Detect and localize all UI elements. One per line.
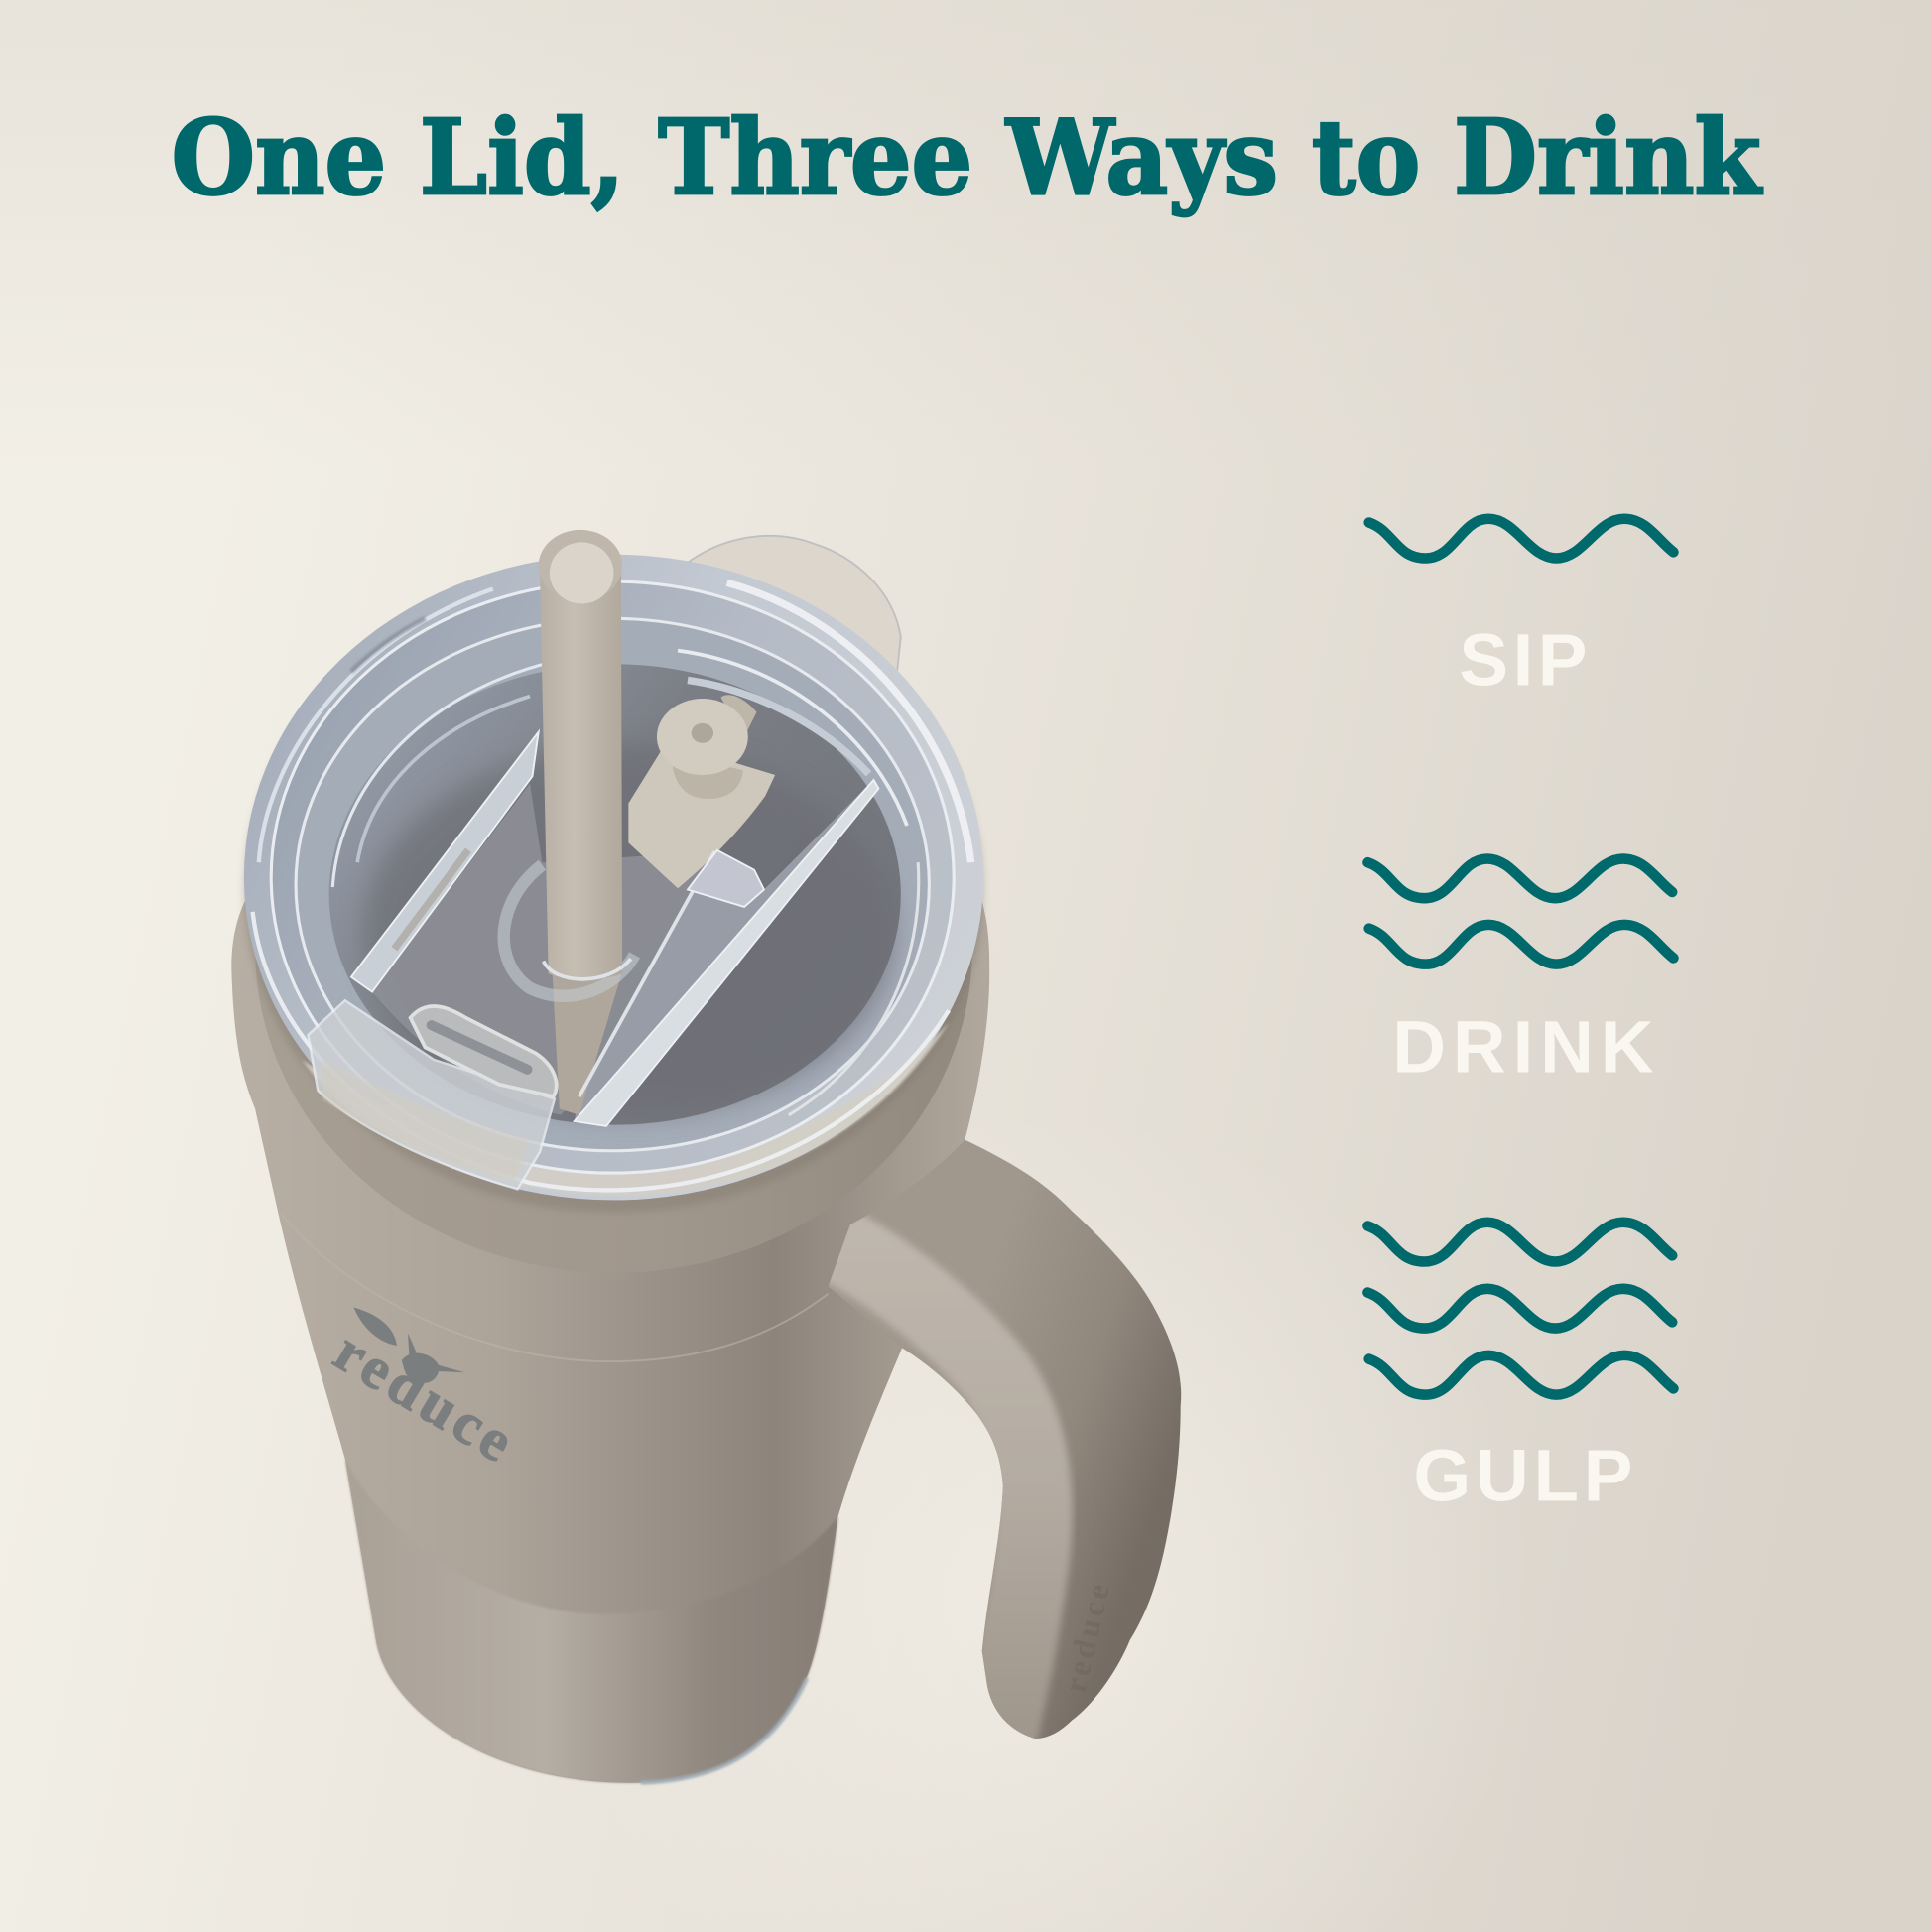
lid outer rim: [244, 555, 983, 1200]
straw opening: [550, 542, 613, 603]
latch grip: [411, 1006, 557, 1096]
lid shadow on neck: [244, 567, 983, 1213]
drink indicator: [1367, 858, 1673, 1088]
stopper base: [628, 742, 775, 888]
hinge clip: [688, 850, 764, 907]
clear strip between rails: [575, 780, 873, 1126]
tumbler handle: [828, 1139, 1181, 1739]
drink wave 1: [1367, 858, 1672, 898]
central slider plate: [372, 784, 714, 1115]
left rail glare: [394, 850, 468, 949]
gulp wave 3: [1369, 1355, 1673, 1395]
gulp label: GULP: [1413, 1434, 1632, 1516]
lid inner well: [329, 664, 901, 1125]
handle engraved wordmark: reduce: [1057, 1577, 1117, 1696]
left slider rail: [351, 732, 539, 992]
gulp wave 2: [1367, 1289, 1672, 1329]
straw slot: [504, 865, 635, 996]
lower body section: [345, 1459, 837, 1783]
inner rail edge: [579, 851, 714, 1096]
rim dark streak: [351, 618, 425, 672]
slider panel: [308, 695, 878, 1189]
tumbler body: [231, 887, 989, 1783]
collar neck band: [255, 625, 972, 1273]
straw tube: [540, 567, 622, 979]
right slider rail: [575, 780, 878, 1126]
handle dark side: [831, 1139, 1181, 1739]
latch bump: [308, 1000, 555, 1189]
silicone stopper: [628, 695, 775, 888]
base blue reflection: [641, 1678, 807, 1783]
title: One Lid, Three Ways to Drink: [172, 96, 1763, 218]
sip wave: [1369, 519, 1673, 558]
stopper nub: [720, 695, 757, 739]
gulp indicator: [1367, 1223, 1673, 1516]
lid middle ring: [271, 581, 954, 1173]
flip tab: [685, 536, 901, 672]
latch tan show-through: [322, 1060, 530, 1181]
reduce logo: [323, 1307, 524, 1475]
well inner wall highlights: [332, 663, 549, 887]
clear lid: [244, 530, 983, 1200]
shoulder seam: [281, 1214, 829, 1361]
tumbler illustration: [231, 530, 1196, 1783]
drink wave 2: [1369, 925, 1673, 965]
straw opening rim: [539, 530, 622, 601]
latch opening: [432, 1025, 528, 1070]
stopper neck: [672, 754, 743, 799]
stopper head: [657, 699, 748, 775]
logo small leaf: [408, 1334, 417, 1355]
tan seen through rim: [302, 1023, 949, 1195]
logo wordmark: reduce: [323, 1318, 524, 1475]
well dark floor: [363, 745, 893, 1115]
drink label: DRINK: [1392, 1005, 1654, 1088]
lid inner ring: [296, 618, 929, 1151]
sip label: SIP: [1459, 618, 1588, 701]
straw: [539, 530, 631, 979]
handle light face: [826, 1238, 1034, 1749]
stopper hole: [692, 723, 713, 743]
logo bird: [402, 1353, 464, 1383]
sip indicator: [1369, 519, 1673, 701]
logo leaf: [353, 1307, 397, 1346]
straw collar ring: [544, 959, 631, 979]
gulp wave 1: [1367, 1223, 1672, 1262]
rim outer highlights: [259, 589, 493, 862]
straw seen through plate: [552, 967, 623, 1115]
